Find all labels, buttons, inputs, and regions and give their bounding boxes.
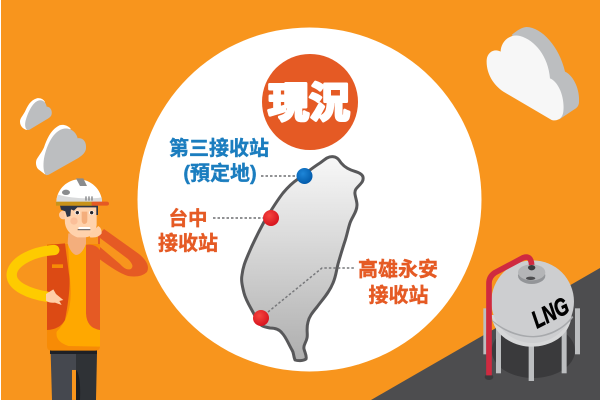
label: third terminal: [169, 136, 269, 185]
LNG tank: [483, 257, 580, 381]
pipe base: [485, 374, 493, 380]
label: third terminal: (預定地): [183, 161, 257, 185]
cloud: small upper left: [20, 98, 52, 130]
white circle panel: [138, 28, 482, 372]
tank body: [492, 315, 572, 347]
label: Kaohsiung Yongan: 高雄永安: [358, 257, 438, 281]
marker: Taichung: [263, 210, 279, 226]
neck: [68, 233, 86, 255]
label: Kaohsiung Yongan: 接收站: [368, 284, 428, 307]
tank shadow: [492, 323, 575, 378]
hard hat: [56, 178, 109, 206]
left arm: [12, 250, 54, 297]
torso: [47, 243, 100, 351]
right arm: [98, 229, 148, 276]
pipe: [489, 257, 532, 375]
label: Taichung: [158, 207, 218, 255]
cloud: larger left: [36, 125, 86, 175]
leader line: Yongan: [268, 268, 354, 312]
person: engineer: [12, 178, 148, 400]
legs: [51, 353, 97, 400]
map: Taiwan: [242, 157, 363, 361]
marker: third terminal: [296, 168, 312, 184]
label: Taichung: 台中: [168, 207, 208, 230]
cloud: top right: [487, 27, 579, 120]
label: Taichung: 接收站: [158, 232, 218, 255]
tank label: LNG: [527, 292, 574, 334]
belt: [50, 350, 97, 354]
ground: [371, 268, 600, 400]
label: Kaohsiung Yongan: [358, 257, 438, 307]
left edge strip: [0, 0, 1, 400]
head: [59, 206, 102, 237]
leader line: Taichung: [213, 217, 265, 219]
label: third terminal: 第三接收站: [169, 136, 269, 160]
tank cap: [518, 264, 545, 284]
hand on waist: [46, 289, 63, 305]
title badge: 現況: [268, 80, 350, 126]
tank legs: [483, 308, 580, 381]
title badge: [262, 54, 358, 150]
leader line: third terminal: [261, 175, 298, 177]
marker: Yongan: [253, 310, 269, 326]
